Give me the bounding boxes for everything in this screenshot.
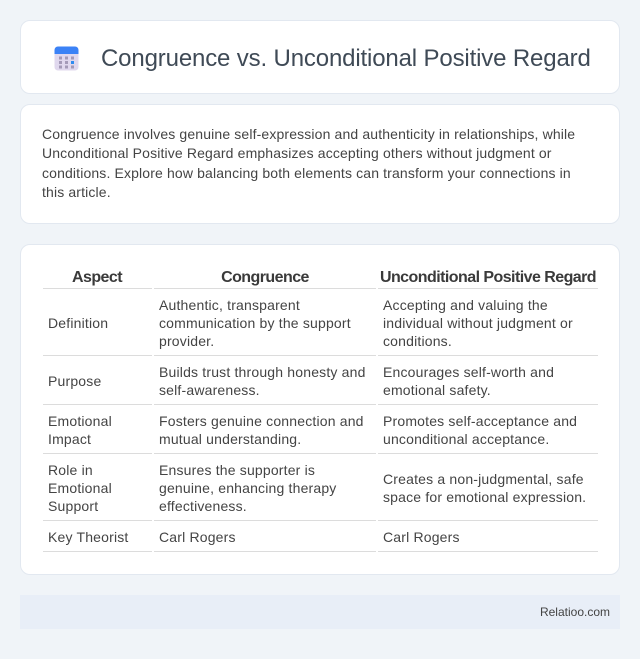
row: Emotional Impact: [48, 413, 577, 447]
row: Role in Emotional Support: effectiveness.: [159, 498, 247, 514]
row: Key Theorist: Key Theorist: [48, 529, 128, 545]
row: Purpose: Purpose: [48, 373, 101, 389]
header: Congruence: Congruence: [221, 269, 309, 286]
header: Unconditional Positive Regard: Unconditional Positive Regard: [380, 269, 596, 286]
panel: title card: [20, 20, 620, 94]
row: Role in Emotional Support: space for emotional expression.: [383, 489, 586, 505]
row: Role in Emotional Support: Emotional: [48, 480, 112, 496]
footer text: Relatioo.com: [540, 605, 610, 619]
intro text: Unconditional Positive Regard emphasizes accepting others without judgment or: [42, 145, 552, 161]
row: Key Theorist: [48, 529, 460, 545]
row: Definition: individual without judgment or: [383, 315, 573, 331]
row: Role in Emotional Support: Ensures the supporter is: [159, 462, 315, 478]
title: Congruence vs. Unconditional Positive Regard: [101, 45, 591, 72]
row: Definition: communication by the support: [159, 315, 351, 331]
row: Definition: [48, 297, 573, 349]
row: Role in Emotional Support: genuine, enhancing therapy: [159, 480, 336, 496]
intro text: [42, 126, 575, 200]
row: Role in Emotional Support: Support: [48, 498, 98, 514]
row: Emotional Impact: Fosters genuine connection and: [159, 413, 364, 429]
table header: [72, 269, 596, 286]
row: Definition: conditions.: [383, 333, 452, 349]
row: Definition: Definition: [48, 315, 108, 331]
row: Role in Emotional Support: Role in: [48, 462, 93, 478]
row: Emotional Impact: Impact: [48, 431, 91, 447]
row: Emotional Impact: Emotional: [48, 413, 112, 429]
row: Emotional Impact: mutual understanding.: [159, 431, 301, 447]
header: Aspect: Aspect: [72, 269, 122, 286]
panel: comparison table: [20, 244, 620, 575]
row: Key Theorist: Carl Rogers: [159, 529, 236, 545]
row: Role in Emotional Support: Creates a non-judgmental, safe: [383, 471, 584, 487]
icon: calendar: [54, 46, 78, 70]
row: Purpose: [48, 364, 554, 398]
row: Emotional Impact: unconditional acceptance.: [383, 431, 549, 447]
row: Purpose: Builds trust through honesty and: [159, 364, 366, 380]
row: Emotional Impact: Promotes self-acceptance and: [383, 413, 577, 429]
footer bar: [20, 595, 620, 629]
intro text: this article.: [42, 184, 111, 200]
row: Key Theorist: Carl Rogers: [383, 529, 460, 545]
row: Definition: provider.: [159, 333, 214, 349]
row: Definition: Accepting and valuing the: [383, 297, 548, 313]
row: Purpose: emotional safety.: [383, 382, 491, 398]
row: Role in Emotional Support: [48, 462, 586, 514]
row: Purpose: self-awareness.: [159, 382, 260, 398]
panel: introduction: [20, 104, 620, 224]
intro text: conditions. Explore how balancing both elements can transform your connections in: [42, 165, 571, 181]
row: Purpose: Encourages self-worth and: [383, 364, 554, 380]
intro text: Congruence involves genuine self-expression and authenticity in relationships, while: [42, 126, 575, 142]
row: Definition: Authentic, transparent: [159, 297, 300, 313]
